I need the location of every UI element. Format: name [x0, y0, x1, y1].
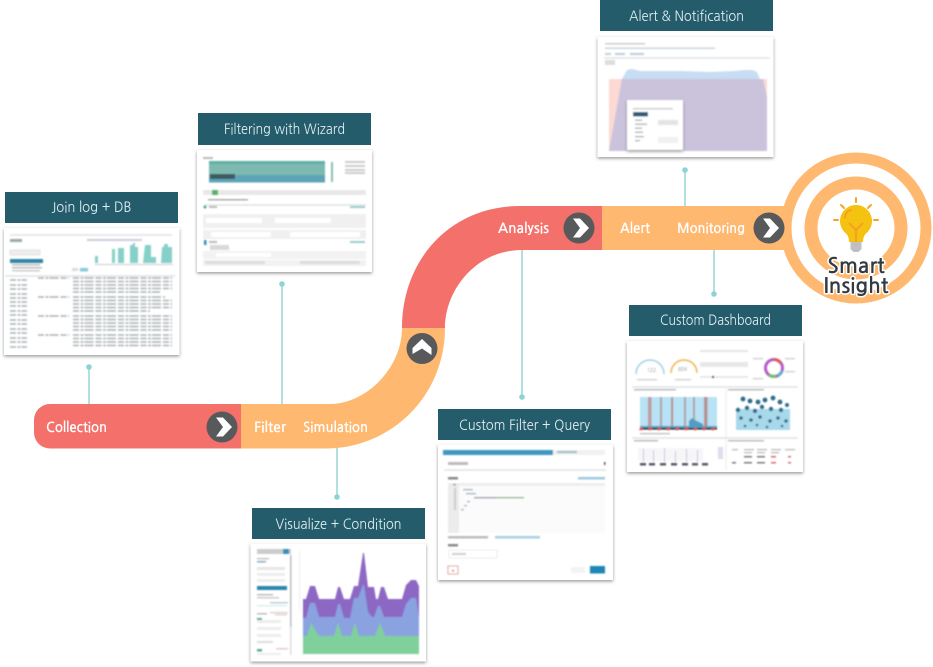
heading: Custom Filter + Query — [459, 418, 590, 433]
label: Smart Insight: Smart — [827, 256, 885, 277]
blue stripe chart — [640, 397, 717, 430]
scatter chart — [736, 396, 790, 430]
pipeline: Collection segment: Collection — [46, 421, 107, 435]
heading: Custom Dashboard — [660, 313, 771, 328]
heading — [438, 409, 611, 440]
pipeline: Analysis segment — [402, 206, 602, 328]
label: Smart Insight — [824, 256, 889, 297]
heading — [252, 508, 425, 539]
heading: Alert & Notification — [629, 9, 744, 24]
pipeline: Filter and Simulation segment: Filter — [254, 421, 287, 435]
connector: Visualize + Condition — [334, 448, 340, 500]
panel: Custom Filter + Query — [438, 409, 613, 580]
mini dot plot — [638, 447, 723, 466]
heading — [5, 192, 178, 223]
heading — [198, 113, 371, 145]
pipeline: Alert and Monitoring segment: Monitoring — [677, 222, 745, 236]
mini table — [732, 449, 795, 464]
gauges — [636, 360, 697, 380]
panel: Custom Dashboard — [627, 305, 803, 472]
donut chart — [766, 360, 782, 376]
screenshot: dashboard — [627, 341, 803, 472]
connector: Join log + DB — [86, 364, 92, 405]
side panel — [257, 549, 292, 655]
screenshot: stacked area chart — [250, 544, 426, 662]
connector: Filtering with Wizard — [279, 281, 285, 405]
arrow: up bend — [406, 333, 438, 364]
screenshot: filter wizard — [197, 150, 372, 272]
panel: Join log + DB — [4, 192, 180, 355]
heading: Join log + DB — [52, 200, 132, 215]
heading — [600, 0, 773, 31]
pipeline: Alert and Monitoring segment: Alert — [620, 222, 651, 236]
panel: Filtering with Wizard — [197, 113, 372, 272]
heading — [629, 305, 802, 336]
panel: Visualize + Condition — [250, 508, 426, 662]
arrow: analysis — [564, 212, 594, 244]
heading: Filtering with Wizard — [224, 122, 345, 137]
pipeline: Alert and Monitoring segment — [602, 206, 802, 250]
heading: Visualize + Condition — [276, 517, 402, 532]
pipeline: Collection segment — [34, 404, 241, 448]
gauges: 122 — [647, 368, 656, 373]
panel: Alert & Notification — [598, 0, 774, 157]
connector: Custom Dashboard — [711, 249, 717, 297]
pipeline: Filter and Simulation segment: Simulation — [303, 421, 368, 435]
arrow: monitoring — [754, 212, 784, 244]
connector: Custom Filter + Query — [519, 250, 525, 400]
connector: Alert & Notification — [682, 167, 688, 207]
gauges: 804 — [678, 367, 687, 372]
pipeline: Analysis segment: Analysis — [498, 222, 549, 236]
label: Smart Insight: Insight — [824, 276, 889, 297]
icon: light bulb — [834, 198, 878, 252]
screenshot: log search — [4, 228, 180, 355]
arrow: collection — [206, 412, 238, 442]
screenshot: alert chart — [598, 37, 774, 157]
stacked areas — [303, 553, 419, 654]
target: Smart Insight — [786, 158, 926, 298]
pipeline: Filter and Simulation segment — [241, 328, 445, 448]
screenshot: query editor — [438, 444, 613, 580]
